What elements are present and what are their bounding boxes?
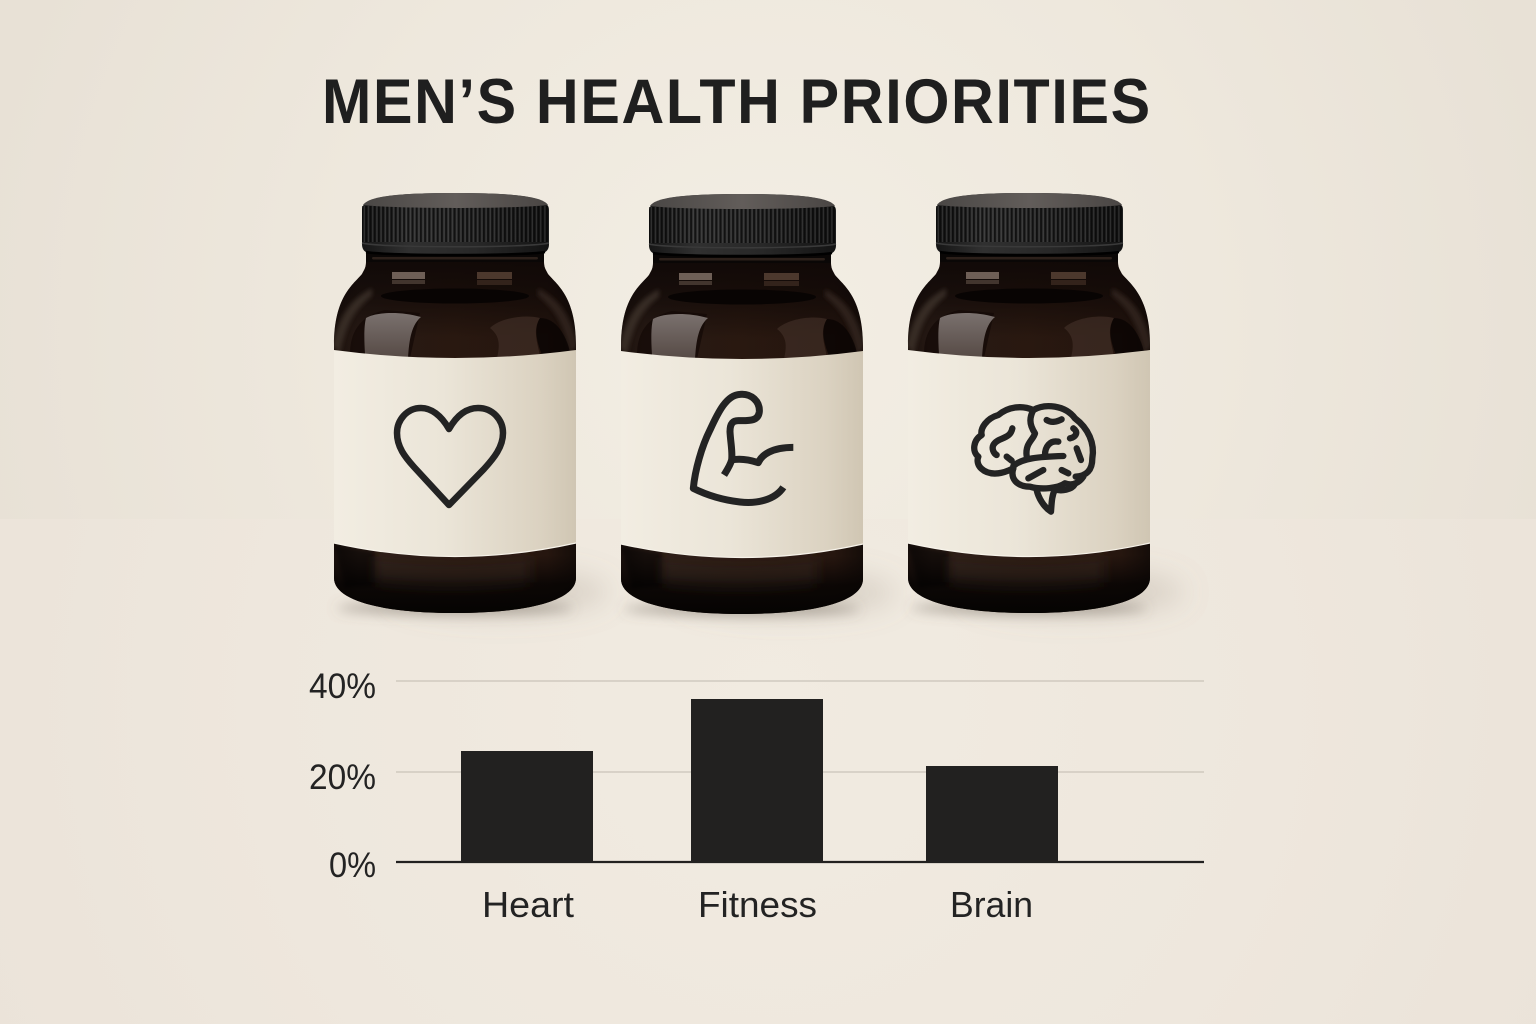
jar: fitness [617, 194, 867, 616]
background table surface [0, 519, 1536, 1024]
bar: Fitness [691, 699, 823, 862]
bar: Heart [461, 751, 593, 862]
bar chart [309, 667, 1204, 925]
jar shadows [337, 570, 1184, 616]
category labels: Brain [950, 884, 1033, 925]
background wall [0, 0, 1536, 519]
category labels: Fitness [698, 884, 817, 925]
category labels: Heart [482, 884, 574, 925]
category labels [482, 884, 1033, 925]
icon: flexed arm [693, 394, 793, 502]
y-axis labels: 20% [309, 758, 376, 797]
y-axis labels [309, 667, 376, 885]
jar: brain [904, 193, 1154, 615]
icon: heart [397, 408, 503, 505]
icon: brain [974, 406, 1093, 512]
y-axis labels: 40% [309, 667, 376, 706]
y-axis labels: 0% [329, 846, 376, 885]
bar: Brain [926, 766, 1058, 862]
jar: heart [330, 193, 580, 615]
title: MEN’S HEALTH PRIORITIES [322, 66, 1150, 136]
